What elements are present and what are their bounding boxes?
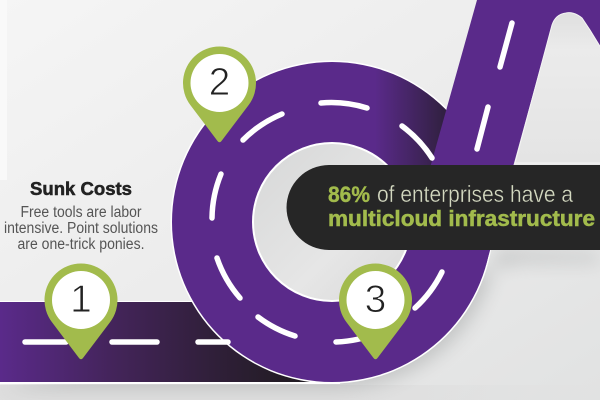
loop centre	[253, 143, 411, 301]
road gap at top right	[515, 13, 600, 163]
pin 3: 3	[365, 278, 386, 321]
body text: intensive. Point solutions	[4, 220, 158, 237]
pin 3	[339, 264, 412, 359]
heading: Sunk Costs: Sunk Costs	[30, 179, 132, 199]
road: rising section	[409, 0, 600, 265]
body text: Free tools are labor	[20, 204, 142, 221]
road drop shadow	[0, 250, 600, 388]
road: circular loop	[170, 55, 494, 384]
pin 1	[44, 264, 117, 359]
road: horizontal section	[0, 301, 340, 384]
lane markings	[25, 23, 512, 342]
pin 2: 2	[209, 61, 230, 104]
pin 2	[183, 47, 256, 142]
body text	[4, 204, 158, 253]
body text: are one-trick ponies.	[18, 236, 144, 253]
callout text: 86%: 86%	[328, 182, 370, 207]
callout bar	[287, 165, 600, 250]
pin 1: 1	[70, 278, 92, 321]
callout text: of enterprises have a: of enterprises have a	[377, 181, 573, 207]
callout text: multicloud infrastructure: multicloud infrastructure	[328, 206, 595, 231]
